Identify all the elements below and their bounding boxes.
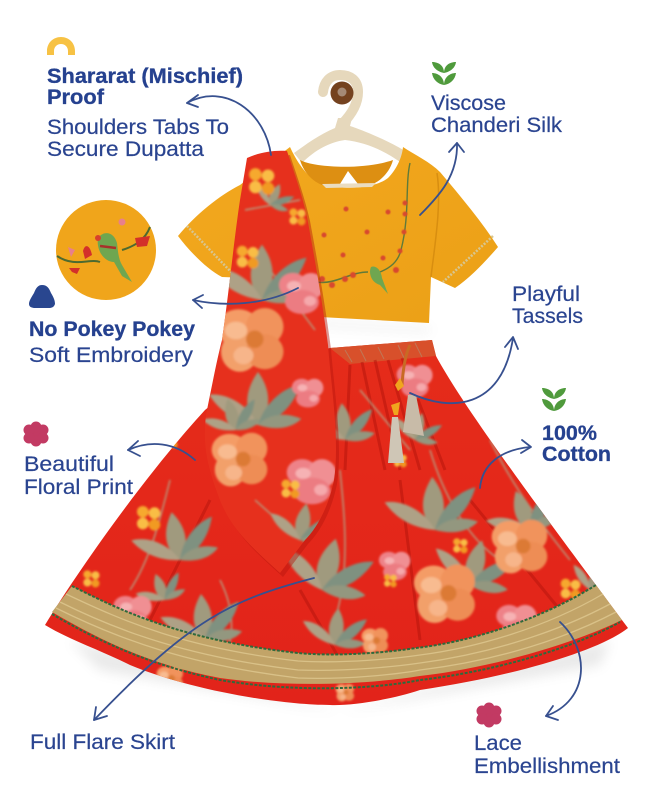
hanger (294, 75, 405, 163)
text: playful tassels: Tassels (512, 305, 583, 328)
text: shoulder tabs (47, 116, 229, 161)
text: lace embellishment (474, 732, 620, 778)
dupatta floral print (199, 168, 336, 546)
text: playful tassels (512, 283, 583, 328)
arrow: viscose (420, 143, 464, 215)
tassels (388, 345, 424, 463)
heading: 100% cotton (542, 422, 611, 466)
arrow: floral print (128, 441, 195, 460)
heading: Sharara Mischief Proof: Shararat (Mischief) (47, 65, 243, 88)
heading: 100% cotton: 100% (542, 422, 597, 445)
text: viscose chanderi silk: Viscose (431, 92, 506, 115)
arrow: playful tassels (410, 337, 518, 403)
text: shoulder tabs: Shoulders Tabs To (47, 116, 229, 139)
heading: Sharara Mischief Proof: Proof (47, 86, 105, 109)
skirt floral print (83, 365, 622, 701)
heading: 100% cotton: Cotton (542, 443, 611, 466)
text: beautiful floral print: Floral Print (24, 476, 133, 499)
text: viscose chanderi silk: Chanderi Silk (431, 114, 563, 137)
text: beautiful floral print: Beautiful (24, 453, 114, 476)
arrow: cotton (480, 440, 531, 488)
icon: green leaves right (542, 388, 566, 411)
icon: magenta flower right (476, 702, 502, 728)
dupatta (205, 151, 339, 577)
skirt (45, 340, 628, 705)
heading: no pokey pokey: No Pokey Pokey (29, 318, 195, 341)
arrow: lace (546, 622, 581, 720)
text: shoulder tabs: Secure Dupatta (47, 138, 204, 161)
text: playful tassels: Playful (512, 283, 580, 306)
icon: blue rounded triangle (29, 285, 55, 308)
blouse (178, 147, 498, 323)
garment shadow (70, 322, 610, 712)
icon: green leaves top (432, 62, 456, 85)
icon: magenta flower left (24, 422, 48, 446)
text: beautiful floral print (24, 453, 133, 499)
icon: embroidered parrot circle (56, 200, 156, 300)
arrow: shoulder tabs (187, 95, 271, 155)
lace band (52, 585, 622, 688)
heading: Sharara Mischief Proof (47, 65, 243, 109)
title icon: yellow arch (47, 37, 75, 55)
arrow: soft embroidery (193, 288, 298, 308)
arrow: full flare skirt (94, 578, 314, 720)
text: lace embellishment: Embellishment (474, 755, 620, 778)
text: full flare skirt: Full Flare Skirt (30, 731, 175, 754)
text: viscose chanderi silk (431, 92, 563, 137)
text: lace embellishment: Lace (474, 732, 522, 755)
text: soft embroidery: Soft Embroidery (29, 344, 194, 367)
